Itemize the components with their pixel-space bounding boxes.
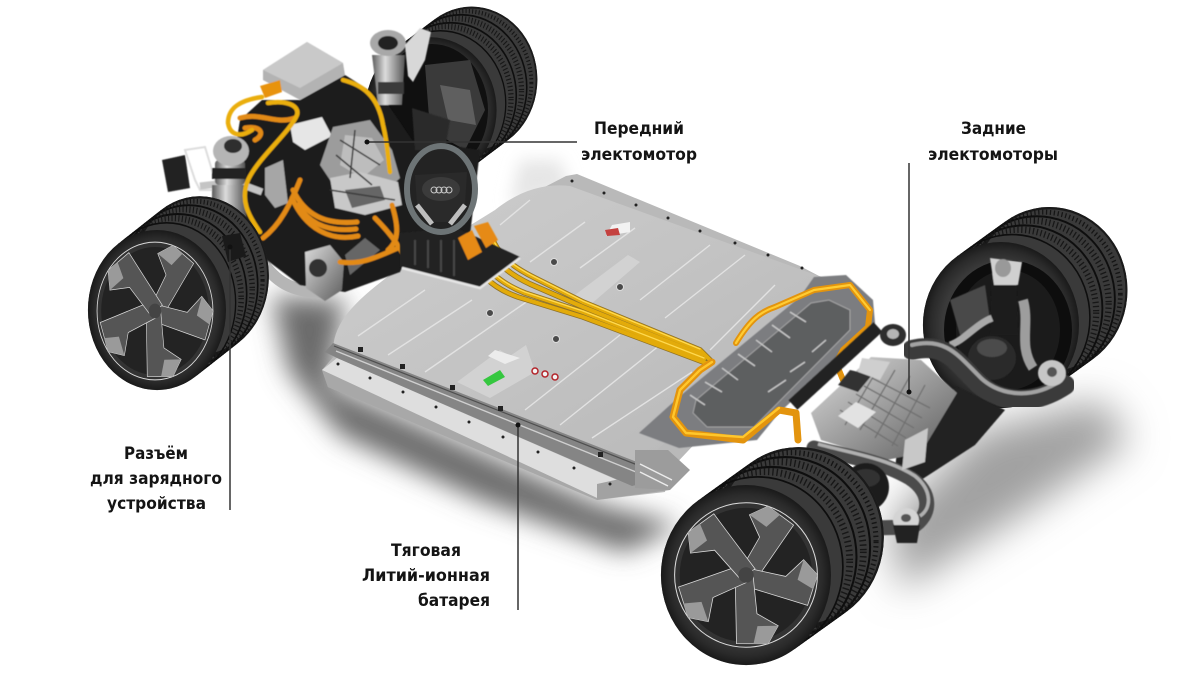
- front suspension arm: [200, 182, 262, 192]
- orange connector: [260, 80, 282, 98]
- wheel: rear near: [661, 447, 884, 665]
- spring cup: [843, 463, 889, 511]
- motor control box: [838, 402, 876, 428]
- battery pack top: [325, 185, 835, 486]
- black bracket: [162, 155, 190, 192]
- knuckle detail: [950, 285, 990, 335]
- yellow cables: [228, 80, 390, 232]
- rear suspension: [912, 258, 1066, 400]
- label: charging port: устройства: [107, 494, 206, 513]
- sticker: green: [483, 370, 505, 386]
- rear electronics cover: [639, 275, 875, 448]
- subframe tube: [912, 348, 1065, 400]
- far strut: [370, 28, 431, 105]
- steering wheel: [407, 146, 475, 232]
- motor casing: [320, 120, 400, 202]
- control box: [263, 42, 345, 100]
- front drive assembly: [162, 28, 480, 301]
- label: charging port: Разъём: [124, 444, 188, 463]
- side rail: [325, 343, 670, 486]
- label: front motor: [581, 119, 697, 164]
- motor fins: [840, 365, 930, 446]
- strut: [990, 272, 1018, 335]
- wheel: front near: [88, 196, 269, 391]
- wheel: rear far: [923, 207, 1127, 408]
- base sled plate: [322, 174, 842, 500]
- label: rear motors: Задние: [961, 119, 1026, 138]
- sled top face: [322, 358, 633, 498]
- high-voltage cables: [472, 237, 870, 440]
- label: charging port: для зарядного: [90, 469, 222, 488]
- axle boot: [412, 108, 450, 150]
- label: battery: Литий-ионная: [362, 566, 490, 585]
- cover raised centre: [693, 300, 850, 427]
- connectors: [458, 222, 498, 260]
- inverter plate: [265, 160, 288, 208]
- casing detail: [330, 130, 395, 200]
- stickers: warning: [532, 368, 558, 380]
- control arms: [950, 318, 992, 345]
- label: front motor: Передний: [594, 119, 684, 138]
- reservoir: [290, 117, 332, 150]
- front subframe: [262, 262, 322, 292]
- ground shadows: [272, 160, 1130, 590]
- steering column base: [400, 222, 520, 288]
- mount: [1038, 360, 1066, 386]
- label: charging port: [90, 444, 222, 513]
- wheel: front far: [365, 7, 537, 183]
- cable edges: [472, 238, 712, 363]
- cover ribs: [690, 312, 826, 405]
- lower subframe tube: [814, 448, 927, 528]
- cable highlights: [478, 237, 704, 358]
- rail clips: [358, 347, 603, 457]
- raised panels: [457, 345, 535, 398]
- panel ribs: [358, 200, 775, 438]
- loop round cover: [673, 362, 798, 440]
- label: front motor: электомотор: [581, 145, 697, 164]
- lower casting: [305, 245, 344, 301]
- cable bodies: [472, 238, 712, 363]
- label: rear motors: электомоторы: [928, 145, 1058, 164]
- sticker: label: [605, 222, 630, 236]
- sled bolts: [336, 180, 804, 486]
- strut: [212, 136, 249, 230]
- sled side face: [322, 370, 597, 500]
- label: battery: Тяговая: [391, 541, 461, 560]
- label: rear motors: [928, 119, 1058, 164]
- arm bracket: [345, 238, 380, 275]
- far wheel brake and knuckle: [425, 60, 485, 150]
- label: battery: батарея: [418, 591, 490, 610]
- mount: [893, 508, 919, 532]
- label: battery: [362, 541, 490, 610]
- rear electric motors: [793, 324, 1005, 543]
- leader lines: [230, 142, 909, 610]
- inner rail: [793, 327, 878, 405]
- bolts: [486, 258, 624, 342]
- orange cables: [240, 116, 402, 263]
- lower body detail under cover: [635, 450, 690, 490]
- spring cup: [968, 336, 1016, 380]
